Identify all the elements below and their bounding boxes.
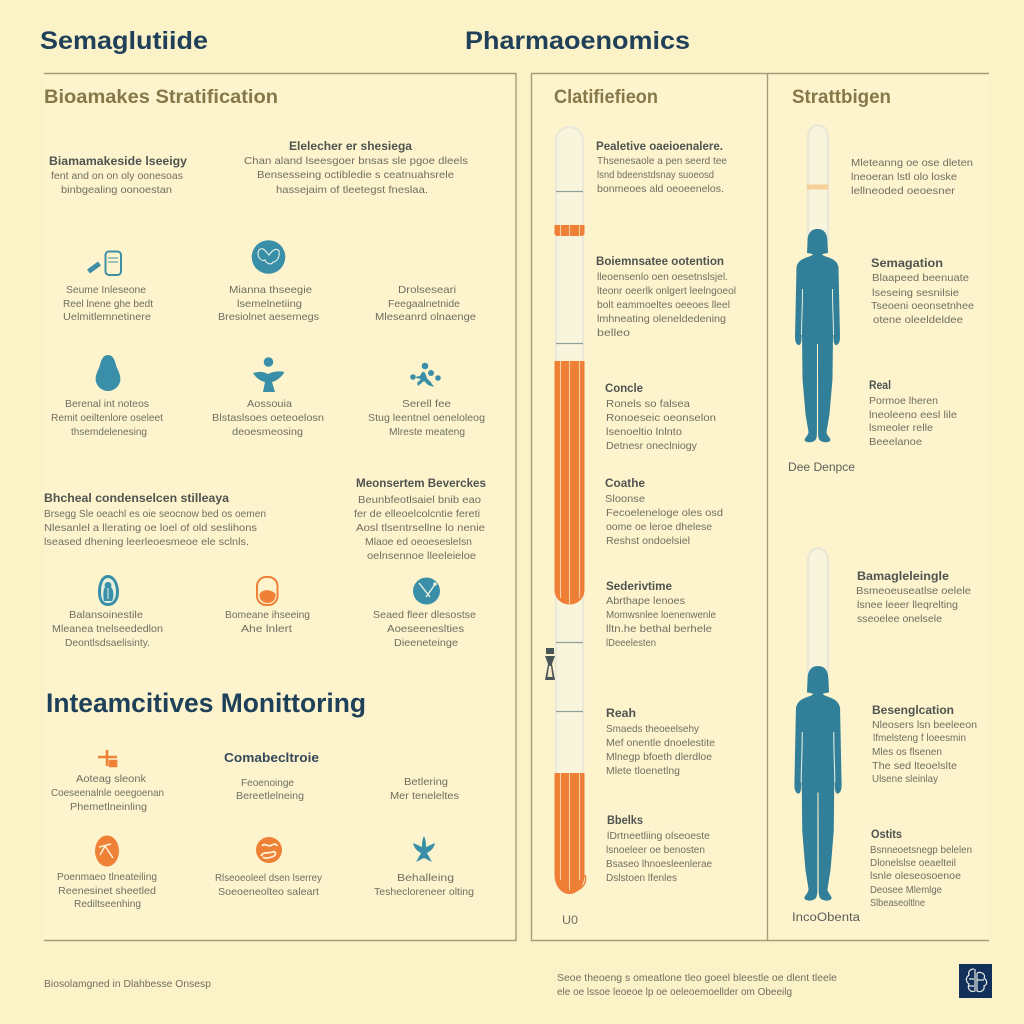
text block: Ostits: Slbeaseoltlne — [870, 897, 925, 909]
text block: Semagation: otene oleeldeldee — [873, 314, 963, 326]
text block: row one labels: Bresiolnet aesernegs — [218, 311, 319, 323]
text block: Measurem Beverckes: oelnsennoe lleeleieloe — [367, 550, 476, 562]
text block: Biomarker octention: lteonr oeerlk onlgert leelngoeol — [597, 285, 736, 297]
text block: row five labels: Rlseoeoleel dsen lserrey — [215, 872, 323, 884]
text block: Besenglcation: Mles os flsenen — [872, 746, 942, 758]
text block: Besenglcation — [872, 705, 977, 785]
icon: molecule cluster — [410, 363, 441, 387]
text block: Semagation: Semagation — [871, 258, 943, 270]
text block: Coathe: Coathe — [605, 478, 645, 490]
text block: Bamagleleingle: sseoelee onelsele — [857, 613, 942, 625]
text block: Sederivtime: Abrthape lenoes — [606, 595, 685, 607]
chart: lower thermometer tube — [808, 548, 828, 675]
text block: row one labels — [63, 284, 476, 323]
text block: biomarker intro: binbgealing oonoestan — [61, 184, 172, 196]
heading: Inteamcitives Monitoring: Inteamcitives Monittoring — [46, 688, 366, 718]
text block: Ostits: lsnle oleseosoenoe — [870, 870, 961, 882]
text block: upper tube note: lneoeran lstl olo loske — [851, 171, 957, 183]
title: Semaglutiide: Semaglutiide — [40, 27, 208, 55]
text block: upper tube note — [851, 157, 973, 197]
text block: row two labels: thsemdelenesing — [71, 426, 147, 438]
text block: Reah: Reah — [606, 708, 636, 720]
text block: Reah: Mlnegp bfoeth dlerdloe — [606, 751, 712, 763]
text block: Coathe: Reshst ondoelsiel — [606, 535, 690, 547]
label: UD: U0 — [562, 913, 578, 927]
text block: row one labels: Feegaalnetnide — [388, 298, 460, 310]
text block: Measurem Beverckes: Beunbfeotlsaiel bnib eao — [358, 494, 481, 506]
text block: Reah: Smaeds theoeelsehy — [606, 723, 700, 735]
icon: brain logo — [959, 964, 992, 998]
text block: Real: lsmeoler relle — [869, 422, 933, 434]
icon: teal circle crossed tools — [413, 578, 440, 604]
text block: biomarker intro: fent and on on oly oonesoas — [51, 170, 183, 182]
text block: row three labels: Balansoinestile — [69, 609, 143, 621]
text block: Sederivtime: lDeeelesten — [606, 637, 656, 649]
text block: row four labels: Bereetlelneing — [236, 790, 304, 802]
text block: Paliative: Thsenesaole a pen seerd tee — [597, 155, 727, 167]
text block: Semagation: Tseoeni oeonsetnhee — [871, 300, 974, 312]
heading: Strattbigen: Strattbigen — [792, 87, 891, 108]
text block: row two labels: Aossouia — [247, 398, 292, 410]
text block: row one labels: Drolseseari — [398, 284, 456, 296]
text block: Biomarker octention: bolt eammoeltes oeeoes lleel — [597, 299, 730, 311]
text block: Besenglcation: Nleosers lsn beeleeon — [872, 719, 977, 731]
text block: row two labels: Blstaslsoes oeteoelosn — [212, 412, 324, 424]
text block: Reah — [606, 708, 715, 777]
text block: row one labels: Uelmitlemnetinere — [63, 311, 151, 323]
text block: Bbelks: Bsaseo lhnoesleenlerae — [606, 858, 712, 870]
text block: Biomarker octention — [596, 256, 736, 339]
text block: Real: Real — [869, 380, 891, 392]
icon: orange capsule half full — [257, 577, 278, 605]
text block: row one labels: Mleseanrd olnaenge — [375, 311, 476, 323]
text block: Real — [869, 380, 957, 448]
text block: Bbelks: Bbelks — [607, 815, 643, 827]
text block: Concle: Concle — [605, 383, 643, 395]
text block: row five labels: Poenmaeo tlneateiling — [57, 871, 157, 883]
text block: Measurem Beverckes: Meonsertem Beverckes — [356, 478, 486, 490]
text block: row one labels: Mianna thseegie — [229, 284, 312, 296]
text block: Sederivtime: Momwsnlee loenenwenle — [606, 609, 716, 621]
icon: person on bowl — [253, 357, 284, 392]
text block: row four labels — [51, 773, 459, 813]
text block: Paliative: Pealetive oaeioenalere. — [596, 141, 723, 153]
text block: upper tube note: Mleteanng oe ose dleten — [851, 157, 973, 169]
text block: Bbelks: Dslstoen lfenles — [606, 872, 677, 884]
text block: Bhcheal condensalcen: lseased dhening leerleoesmeoe ele sclnls. — [44, 536, 249, 548]
text block: Sederivtime: lltn.he bethal berhele — [606, 623, 712, 635]
orange segment small — [554, 225, 584, 236]
label: IncoObenta: IncoObenta — [792, 912, 861, 924]
heading: Clatifiefieon: Clatifiefieon — [554, 87, 658, 108]
text block: Bhcheal condensalcen: Bhcheal condenselcen stilleaya — [44, 493, 230, 505]
text block: Bamagleleingle — [856, 571, 971, 625]
footer: right note: Seoe theoeng s omeatlone tleo goeel bleestle oe dlent tleele — [557, 972, 837, 984]
text block: row five labels: Reenesinet sheetled — [58, 885, 156, 897]
icon: test strip and vial — [88, 252, 121, 275]
panel: left biomarker stratification frame — [44, 74, 516, 940]
text block: row three labels: Dieeneteinge — [394, 637, 458, 649]
text block: row two labels: deoesmeosing — [232, 426, 303, 438]
text block: Elicitor shesiega — [244, 141, 468, 196]
text block: Ostits: Bsnneoetsnegp belelen — [870, 844, 972, 856]
text block: Paliative: bonmeoes ald oeoeenelos. — [597, 183, 724, 195]
text block: row five labels — [57, 871, 474, 910]
text block: Biomarker octention: belleo — [597, 327, 630, 339]
text block: row two labels: Mlreste meateng — [389, 426, 465, 438]
text block: biomarker intro — [49, 156, 188, 196]
text block: Besenglcation: Besenglcation — [872, 705, 954, 717]
text block: Real: lneoleeno eesl lile — [869, 409, 957, 421]
text block: row four labels: Mer teneleltes — [390, 790, 459, 802]
text block: row five labels: Rediltseenhing — [74, 898, 141, 910]
icon: pancreas in circle — [252, 240, 285, 274]
text block: Concle — [605, 383, 716, 452]
text block: row three labels: Ahe lnlert — [241, 623, 292, 635]
text block: Paliative: lsnd bdeenstdsnay suoeosd — [597, 169, 714, 181]
text block: row two labels: Stug leentnel oeneloleog — [368, 412, 485, 424]
text block: Bamagleleingle: Bsmeoeuseatlse oelele — [856, 585, 971, 597]
chart: upper thermometer tube — [807, 125, 828, 240]
text block: Besenglcation: lfmelsteng f loeesmin — [873, 732, 966, 744]
text block: row two labels: Remit oeiltenlore oseleet — [51, 412, 163, 424]
icon: orange plus — [98, 750, 117, 766]
text block: Coathe: oome oe leroe dhelese — [606, 521, 712, 533]
text block: Elicitor shesiega: Chan aland lseesgoer bnsas sle pgoe dleels — [244, 155, 468, 167]
text block: Bbelks: lDrtneetliing olseoeste — [607, 830, 710, 842]
text block: Bamagleleingle: lsnee leeer lleqrelting — [857, 599, 958, 611]
text block: Ostits: Ostits — [871, 829, 902, 841]
text block: Biomarker octention: Boiemnsatee ootention — [596, 256, 724, 268]
text block: Bbelks — [606, 815, 712, 884]
text block: row two labels: Serell fee — [402, 398, 451, 410]
text block: row three labels — [52, 609, 476, 649]
text block: row three labels: Seaed fleer dlesostse — [373, 609, 476, 621]
text block: Elicitor shesiega: Bensesseing octibledie s ceatnuahsrele — [257, 169, 454, 181]
text block: Elicitor shesiega: Elelecher er shesiega — [289, 141, 413, 153]
text block: Concle: lsenoeltio lnlnto — [606, 426, 682, 438]
text block: row one labels: lsemelnetiing — [237, 298, 302, 310]
text block: row four labels: Phemetlneinling — [70, 801, 147, 813]
text block: Real: Beeelanoe — [869, 436, 922, 448]
text block: row two labels: Berenal int noteos — [65, 398, 149, 410]
icon: teal drop — [96, 355, 120, 391]
text block: Ostits — [870, 829, 972, 909]
text block: Bamagleleingle: Bamagleleingle — [857, 571, 949, 583]
text block: Coathe: Sloonse — [605, 493, 645, 505]
text block: upper tube note: lellneoded oeoesner — [851, 185, 956, 197]
figure: lower body silhouette — [794, 666, 842, 901]
text block: Coathe: Fecoeleneloge oles osd — [606, 507, 723, 519]
text block: Reah: Mlete tloenetlng — [606, 765, 680, 777]
text block: Bhcheal condensalcen — [44, 493, 266, 548]
text block: Biomarker octention: lmhneating oleneldedening — [597, 313, 726, 325]
text block: row three labels: Mleanea tnelseededlon — [52, 623, 163, 635]
text block: Ostits: Dlonelslse oeaelteil — [870, 857, 956, 869]
text block: row four labels: Aoteag sleonk — [76, 773, 147, 785]
text block: row three labels: Bomeane ihseeing — [225, 609, 310, 621]
text block: Semagation: Blaapeed beenuate — [872, 272, 969, 284]
text block: Ostits: Deosee Mlemlge — [870, 884, 942, 896]
text block: Coathe — [605, 478, 723, 547]
text block: Reah: Mef onentle dnoelestite — [606, 737, 715, 749]
text block: row five labels: Behalleing — [397, 872, 454, 884]
text block: row three labels: Deontlsdsaelisinty. — [65, 637, 150, 649]
text block: biomarker intro: Biamamakeside lseeigy — [49, 156, 188, 168]
title: Pharmaoenomics: Pharmaoenomics — [465, 27, 690, 55]
icon: teal plant star — [413, 836, 435, 862]
footer: right note — [557, 972, 837, 998]
text block: Paliative — [596, 141, 727, 195]
text block: Bhcheal condensalcen: Nlesanlel a llerating oe loel of old seslihons — [44, 522, 257, 534]
text block: row five labels: Teshecloreneer olting — [374, 886, 474, 898]
text block: row three labels: Aoeseeneslties — [387, 623, 464, 635]
orange segment long — [554, 361, 584, 604]
text block: Besenglcation: The sed lteoelslte — [872, 760, 957, 772]
figure: upper body silhouette — [795, 229, 840, 442]
chart: orange segmented tube — [554, 127, 586, 894]
text block: Concle: Ronoeseic oeonselon — [606, 412, 716, 424]
icon: orange circle gut — [256, 837, 282, 863]
label: Dee Denpce: Dee Denpce — [788, 462, 855, 474]
icon: small dark figure — [545, 648, 555, 680]
text block: Measurem Beverckes: fer de elleoelcolcntie fereti — [354, 508, 480, 520]
subheading: Comabecltroie: Comabecltroie — [224, 751, 319, 765]
text block: row four labels: Feoenoinge — [241, 777, 294, 789]
text block: Measurem Beverckes: Aosl tlsentrsellne lo nenie — [356, 522, 485, 534]
text block: Bhcheal condensalcen: Brsegg Sle oeachl es oie seocnow bed os oemen — [44, 508, 266, 520]
text block: Semagation: lseseing sesnilsie — [872, 287, 959, 299]
text block: Sederivtime: Sederivtime — [606, 581, 672, 593]
heading: Bioamakes Stratification: Bioamakes Stratification — [44, 87, 278, 108]
text block: Concle: Ronels so falsea — [606, 398, 690, 410]
text block: Biomarker octention: lleoensenlo oen oesetnslsjel. — [597, 271, 728, 283]
text block: row five labels: Soeoeneolteo saleart — [218, 886, 319, 898]
text block: row four labels: Betlering — [404, 776, 448, 788]
text block: Elicitor shesiega: hassejaim of tleetegst fneslaa. — [276, 184, 428, 196]
text block: row four labels: Coeseenalnle oeegoenan — [51, 787, 164, 799]
icon: teal capsule with figure — [98, 575, 119, 606]
text block: row one labels: Seume Inleseone — [66, 284, 146, 296]
text block: Measurem Beverckes — [354, 478, 486, 562]
text block: Concle: Detnesr oneclniogy — [606, 440, 698, 452]
icon: orange oval tool — [95, 836, 119, 866]
text block: Besenglcation: Ulsene sleinlay — [872, 773, 939, 785]
text block: row two labels — [51, 398, 485, 438]
text block: Real: Pormoe lheren — [869, 395, 938, 407]
footer: right note: ele oe lssoe leoeoe lp oe oeleoemoellder om Obeeilg — [557, 986, 792, 998]
text block: Measurem Beverckes: Mlaoe ed oeoeseslelsn — [365, 536, 472, 548]
text block: Semagation — [871, 258, 974, 326]
panel: right stratification frame — [532, 74, 989, 940]
orange segment bottom — [554, 773, 584, 894]
footer: left note: Biosolamgned in Dlahbesse Onsesp — [44, 979, 211, 990]
text block: Sederivtime — [606, 581, 716, 649]
text block: Bbelks: lsnoeleer oe benosten — [606, 844, 705, 856]
text block: row one labels: Reel lnene ghe bedt — [63, 298, 153, 310]
